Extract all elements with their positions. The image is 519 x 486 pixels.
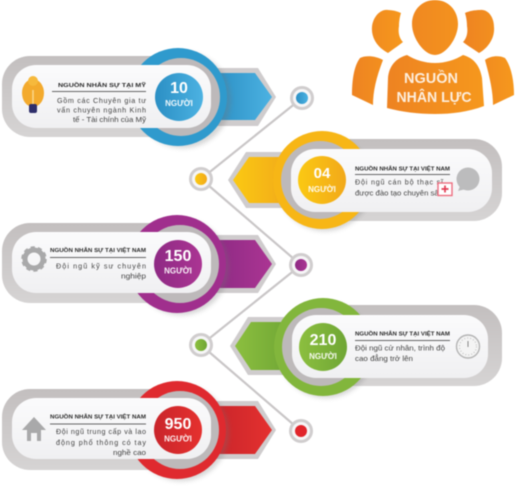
number badge <box>298 156 346 204</box>
text block <box>355 164 451 198</box>
text block: Đội ngũ cán bộ thạc sĩ <box>355 178 444 186</box>
number badge: NGƯỜI <box>165 99 193 108</box>
arrow <box>215 68 276 126</box>
number badge: NGƯỜI <box>164 434 192 444</box>
text block: NGUỒN NHÂN SỰ TẠI VIỆT NAM <box>50 412 147 420</box>
number badge: NGƯỜI <box>164 266 192 276</box>
icon: clock <box>456 335 480 358</box>
icon: people group with heading: NHÂN LỰC <box>396 88 472 106</box>
dot: yellow node <box>189 167 213 191</box>
white pill <box>292 315 488 378</box>
number badge: 150 <box>165 248 191 265</box>
ring <box>133 385 229 481</box>
dot: green node <box>189 333 213 357</box>
panel: green, bachelors <box>230 298 502 398</box>
white pill <box>291 149 492 212</box>
number badge <box>154 240 202 288</box>
text block: cao đẳng trở lên <box>355 354 413 363</box>
text block: Đội ngũ cử nhân, trình độ <box>355 344 445 352</box>
ring <box>277 135 373 231</box>
white pill <box>12 232 211 293</box>
pill frame <box>310 305 502 386</box>
ring <box>278 302 374 398</box>
text block: NGUỒN NHÂN SỰ TẠI MỸ <box>58 82 147 89</box>
white pill <box>12 65 211 128</box>
ring <box>135 52 231 148</box>
icon: gear <box>23 248 45 270</box>
connector lines between the dots <box>201 98 302 431</box>
text block: được đào tạo chuyên sâu <box>355 188 443 198</box>
dot: blue node <box>290 86 314 110</box>
text block <box>50 246 147 280</box>
text block: nghề cao <box>113 448 146 457</box>
panel: yellow, masters <box>228 131 502 231</box>
text block: tế - Tài chính của Mỹ <box>73 115 146 124</box>
number badge: 950 <box>165 416 191 433</box>
panel: blue, experts from the US <box>2 48 276 148</box>
pill frame <box>310 139 502 221</box>
text block: NGUỒN NHÂN SỰ TẠI VIỆT NAM <box>355 164 451 172</box>
arrow <box>228 152 290 208</box>
dot: red node <box>289 419 313 443</box>
number badge <box>299 323 347 371</box>
text block <box>50 412 147 457</box>
text block: NGUỒN NHÂN SỰ TẠI VIỆT NAM <box>50 246 147 254</box>
text block: Đội ngũ trung cấp và lao <box>56 427 146 436</box>
icon: light bulb <box>22 76 44 113</box>
arrow <box>215 401 276 459</box>
pill frame <box>2 223 192 303</box>
number badge: 04 <box>314 165 331 182</box>
icon: speech bubble <box>456 168 480 191</box>
text block: nghiệp <box>121 272 146 280</box>
text block: vấn chuyên ngành Kinh <box>57 106 146 114</box>
right person <box>463 10 514 105</box>
number badge: 210 <box>310 332 336 349</box>
icon: house <box>22 417 46 441</box>
arrow <box>230 317 290 375</box>
text block: NGUỒN NHÂN SỰ TẠI VIỆT NAM <box>355 330 451 338</box>
white pill <box>12 398 211 459</box>
text block: động phổ thông có tay <box>56 438 146 447</box>
number badge <box>154 406 202 454</box>
center person <box>387 0 484 114</box>
pill frame <box>2 389 192 470</box>
heading: NGUỒN <box>404 69 458 87</box>
ring <box>133 219 229 315</box>
icon: people group with heading <box>352 0 514 114</box>
number badge: 10 <box>170 80 188 97</box>
icon: pink plus badge <box>438 183 452 196</box>
text block: Đội ngũ kỹ sư chuyên <box>56 262 146 270</box>
number badge <box>155 73 203 121</box>
arrow <box>215 235 276 293</box>
number badge: NGƯỜI <box>308 185 336 194</box>
pill frame <box>2 56 192 137</box>
number badge: NGƯỜI <box>309 352 337 361</box>
text block <box>355 330 451 363</box>
left person <box>352 10 403 105</box>
text block <box>52 82 147 124</box>
panel: purple, engineers <box>2 215 276 315</box>
dot: purple node <box>289 253 313 277</box>
panel: red, vocational workers <box>2 381 276 481</box>
text block: Gồm các Chuyên gia tư <box>57 96 146 105</box>
